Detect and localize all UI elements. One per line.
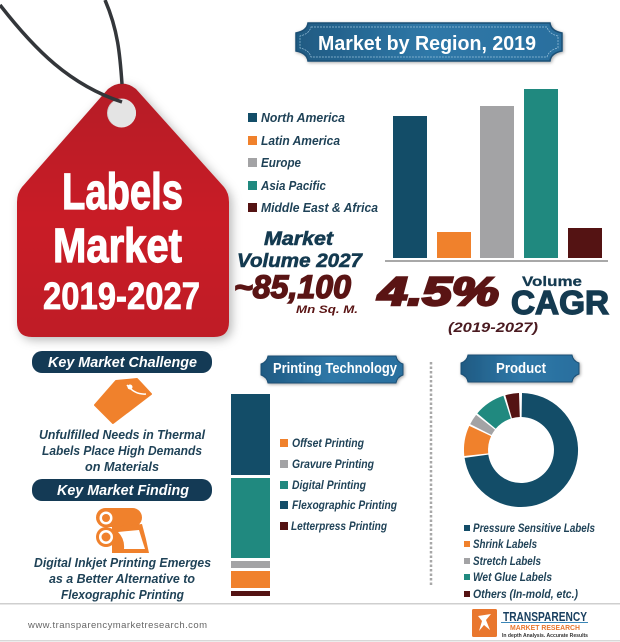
tag body (17, 84, 229, 337)
printing technology legend: Offset Printing (292, 438, 364, 450)
region legend: Middle East & Africa (261, 201, 378, 215)
banner: product: Product (496, 360, 546, 377)
printing technology legend: Gravure Printing (292, 459, 374, 471)
printing technology legend: Flexographic Printing (292, 500, 397, 512)
website url: www.transparencymarketresearch.com (27, 620, 207, 631)
logo: transparency market research (472, 609, 588, 639)
key market finding heading (32, 479, 212, 501)
red hanging tag with title (0, 0, 229, 337)
printing technology legend: Digital Printing (292, 480, 366, 492)
product legend: Pressure Sensitive Labels (473, 523, 595, 535)
key market finding heading: Key Market Finding (57, 482, 189, 499)
key market challenge heading: Key Market Challenge (48, 354, 197, 371)
challenge text: on Materials (85, 460, 159, 474)
tag hole (108, 99, 136, 127)
product legend: Shrink Labels (473, 539, 537, 551)
printing technology legend (280, 438, 397, 533)
region legend: North America (261, 111, 345, 125)
region legend: Europe (261, 156, 301, 170)
logo: transparency market research: In depth Analysis. Accurate Results (502, 633, 588, 639)
bar chart: market by region (385, 89, 608, 262)
finding text (34, 556, 211, 602)
challenge text (39, 428, 206, 474)
CAGR callout: (2019-2027) (448, 319, 538, 335)
logo: transparency market research: MARKET RESEARCH (510, 625, 580, 632)
banner: printing technology: Printing Technology (273, 360, 398, 377)
CAGR callout: CAGR (511, 284, 609, 321)
banner: market by region: Market by Region, 2019 (318, 33, 536, 55)
market volume callout: Volume 2027 (237, 251, 364, 272)
tag title: 2019-2027 (43, 276, 200, 318)
logo: transparency market research: TRANSPARENCY (503, 609, 587, 624)
finding text: Digital Inkjet Printing Emerges (34, 556, 211, 570)
tag title: Labels (62, 163, 183, 220)
product legend: Others (In-mold, etc.) (473, 589, 578, 601)
CAGR callout: 4.5% (377, 270, 499, 314)
printing technology legend: Letterpress Printing (291, 521, 387, 533)
donut chart: product (464, 393, 578, 507)
region legend: Asia Pacific (260, 179, 326, 193)
icon: printing rollers (96, 508, 149, 553)
stacked bar: printing technology (231, 394, 270, 596)
CAGR callout (377, 270, 609, 335)
icon: orange label tag (95, 379, 151, 423)
market volume callout: Market (264, 229, 334, 250)
banner: market by region (296, 23, 562, 61)
market volume callout: ~85,100 (234, 269, 351, 305)
strings (0, 5, 122, 102)
challenge text: Labels Place High Demands (42, 444, 202, 458)
finding text: Flexographic Printing (61, 588, 184, 602)
key market challenge heading (32, 351, 212, 373)
product legend (464, 523, 595, 601)
product legend: Stretch Labels (473, 556, 541, 568)
banner: printing technology (261, 356, 403, 383)
tag title (43, 163, 200, 318)
banner: product (461, 355, 579, 382)
market volume callout (234, 229, 364, 316)
product legend: Wet Glue Labels (473, 572, 552, 584)
challenge text: Unfulfilled Needs in Thermal (39, 428, 206, 442)
market volume callout: Mn Sq. M. (296, 304, 358, 316)
region legend: Latin America (261, 134, 340, 148)
region legend (248, 111, 378, 215)
tag title: Market (53, 220, 182, 273)
CAGR callout: Volume (522, 273, 582, 289)
finding text: as a Better Alternative to (49, 572, 195, 586)
